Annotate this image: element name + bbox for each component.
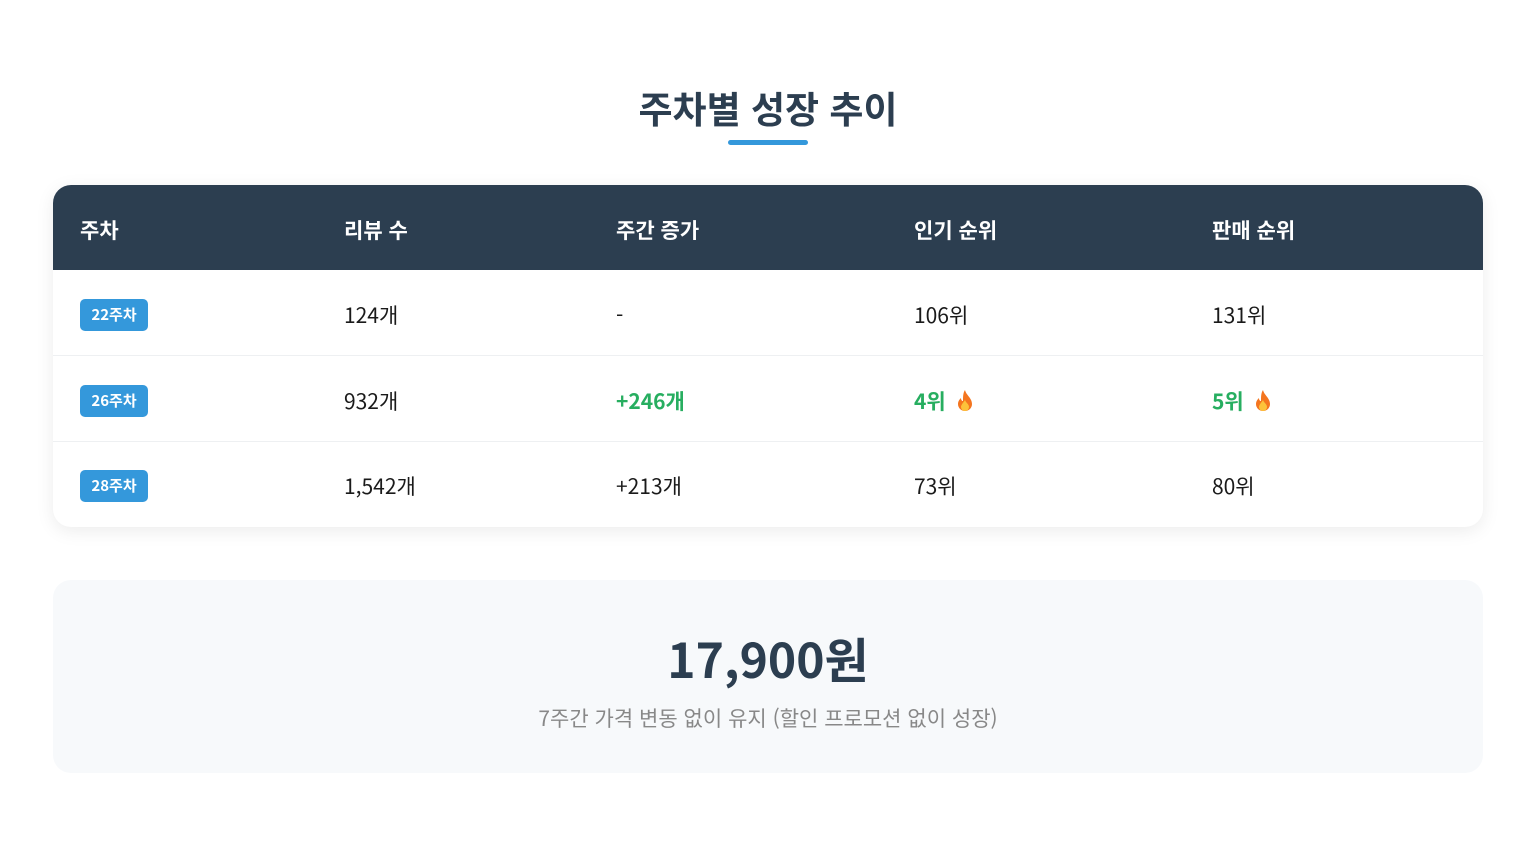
row: week 28: +213개 [616,471,682,501]
table header: 판매 순위 [1212,214,1295,244]
table header: 주차 [80,214,119,244]
title: 주차별 성장 추이 [638,80,898,134]
row: week 28: 73위 [914,471,957,501]
row: week 28: 1,542개 [344,471,416,501]
row: week 28: 80위 [1212,471,1255,501]
row: week 26: 4위 [914,386,946,416]
panel: price [53,580,1483,773]
table header: 주간 증가 [616,214,699,244]
price note: 7주간 가격 변동 없이 유지 (할인 프로모션 없이 성장) [538,703,998,733]
row: week 22: 106위 [914,300,968,330]
table header: 인기 순위 [914,214,997,244]
row: week 22 [53,270,1483,356]
row: week 22: 131위 [1212,300,1266,330]
row: week 26 [53,356,1483,442]
panel: growth table [53,185,1483,527]
title underline [728,140,808,145]
row: week 22: 22주차 [91,304,137,324]
row: week 28: 28주차 [91,475,137,496]
row: week 26: +246개 [616,386,685,416]
row: week 22: 124개 [344,300,398,330]
table header [53,185,1483,270]
row: week 28 [80,470,1255,502]
row: week 26: 26주차 [91,390,137,410]
price value: 17,900원 [667,622,869,692]
row: week 26: 5위 [1212,386,1244,416]
table header: 리뷰 수 [344,214,408,244]
row: week 22: - [616,300,623,330]
row: week 26: 932개 [344,386,398,416]
